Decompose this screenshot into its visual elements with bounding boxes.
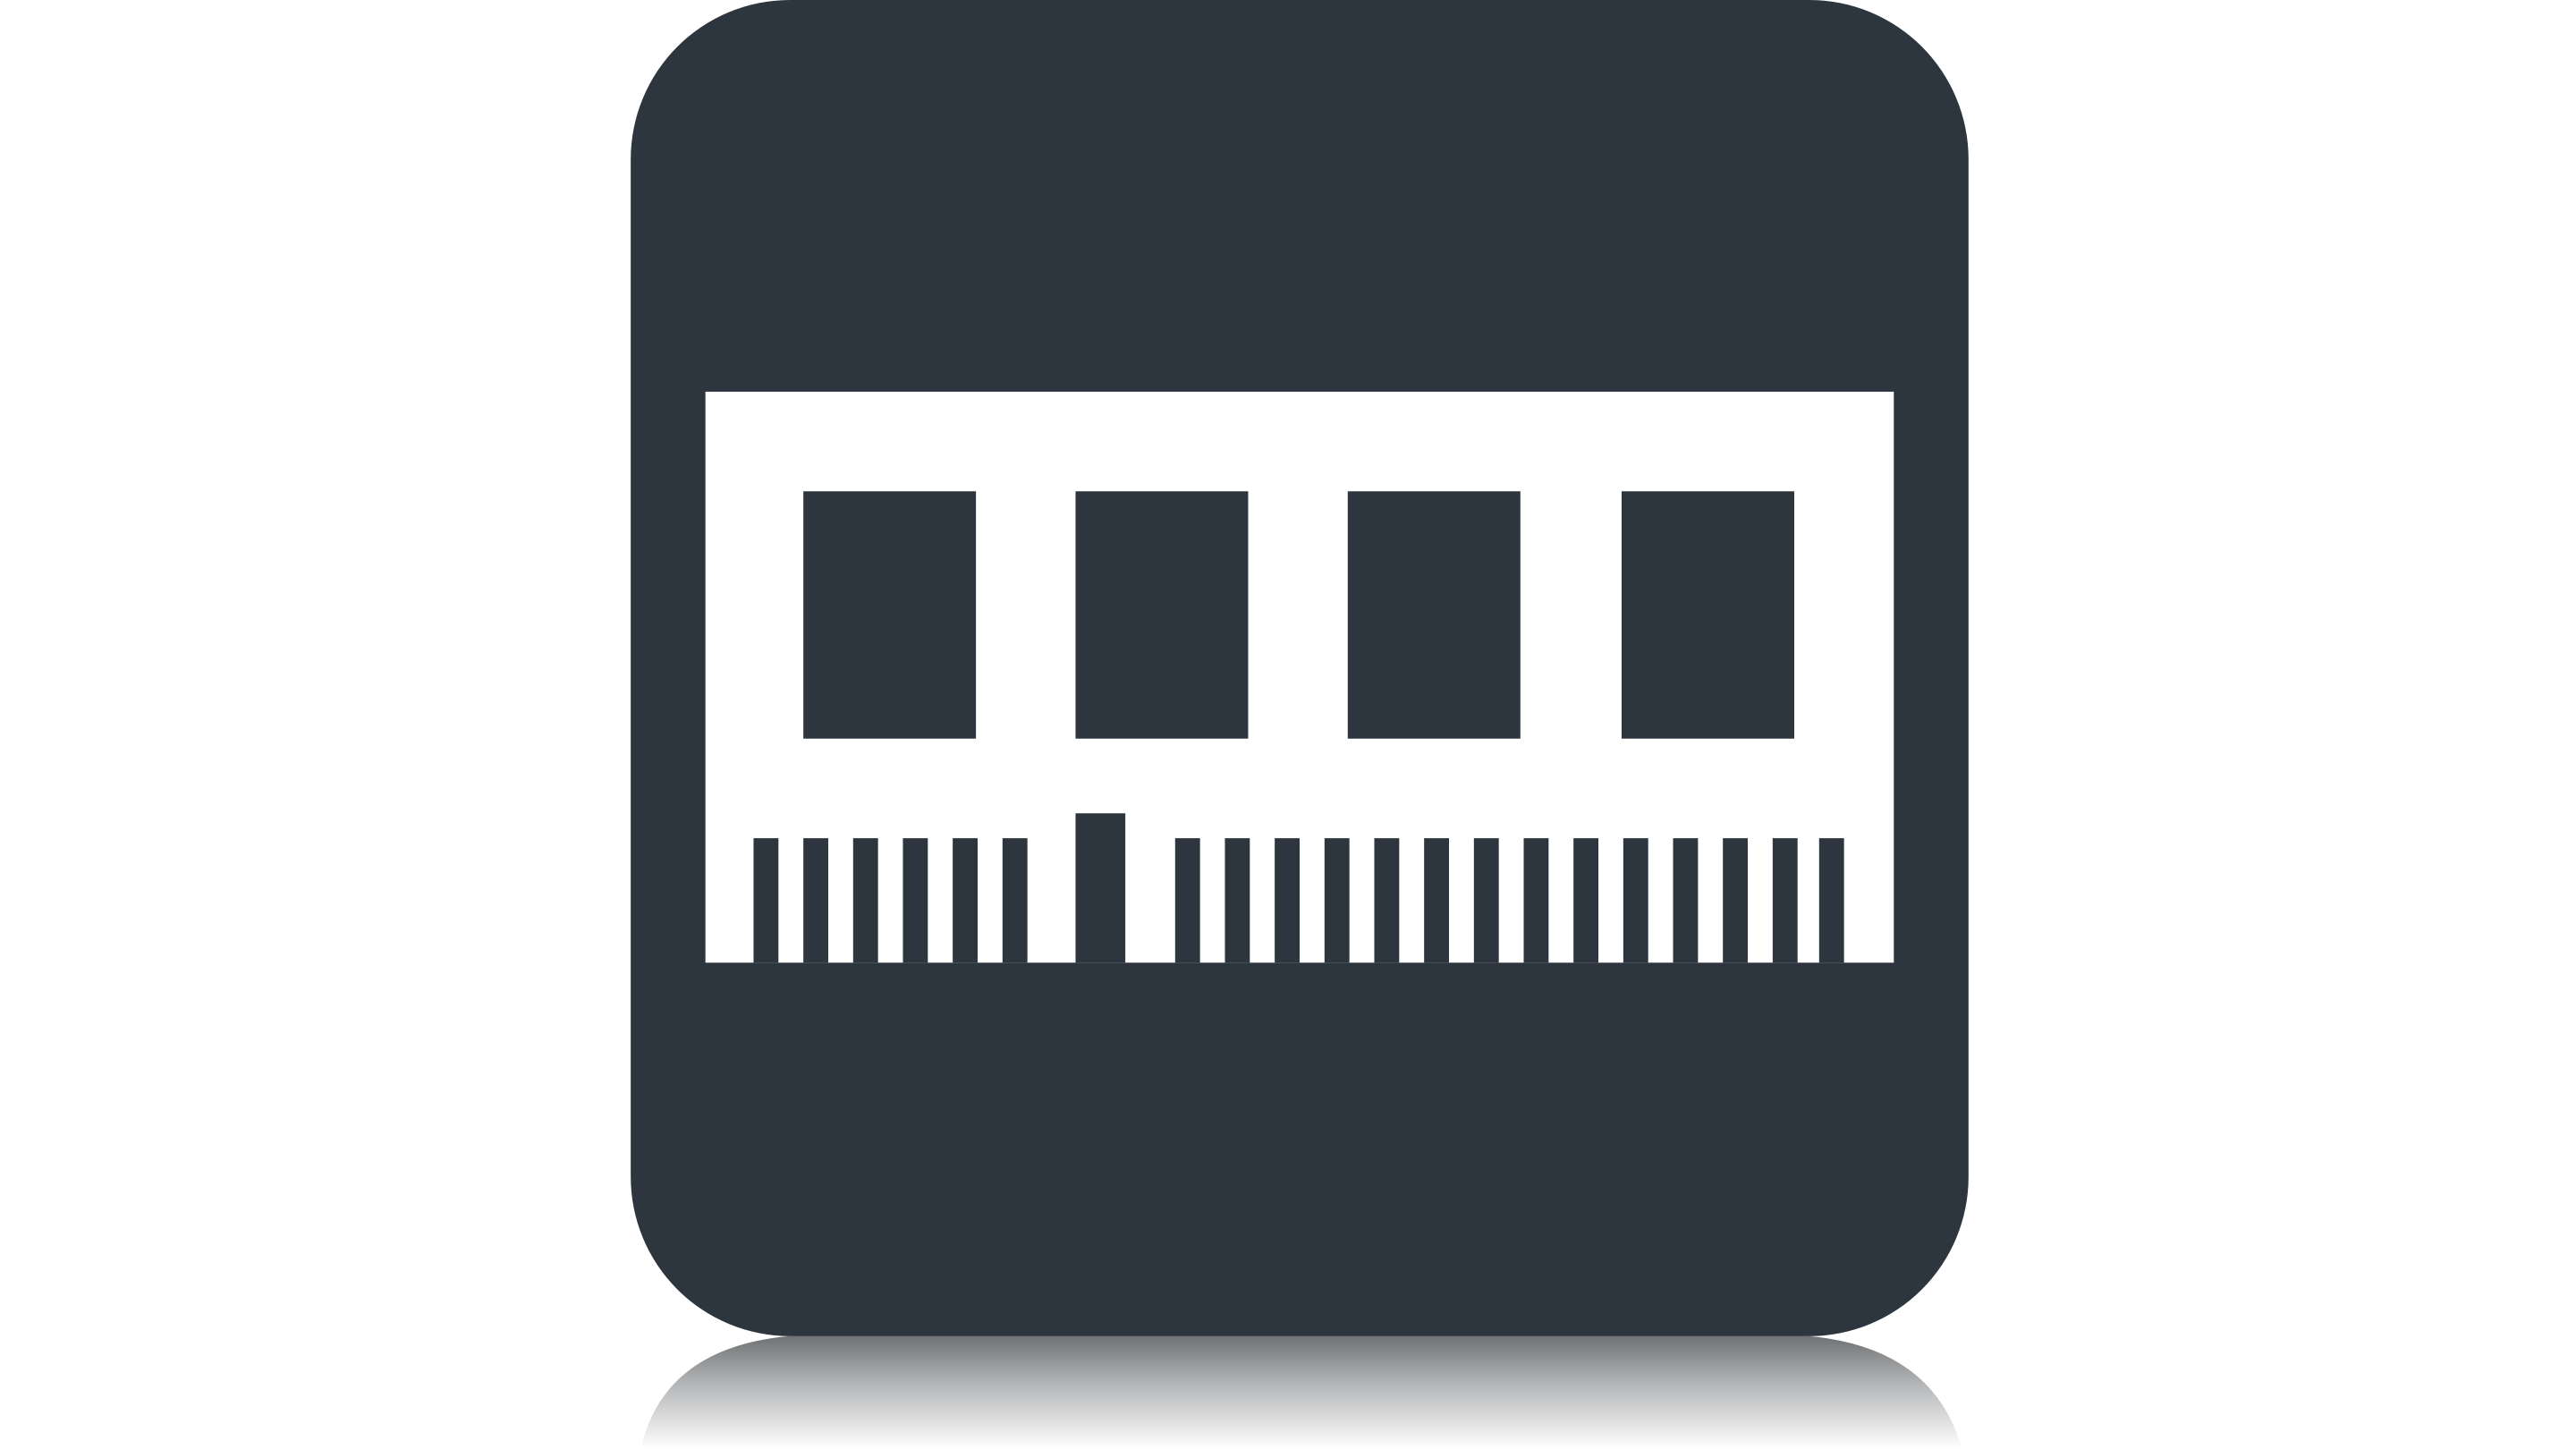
chips [803,491,1794,739]
contact teeth [753,813,1844,962]
module board [706,392,1894,962]
reflection [640,1336,1962,1449]
rounded square background [631,0,1969,1336]
